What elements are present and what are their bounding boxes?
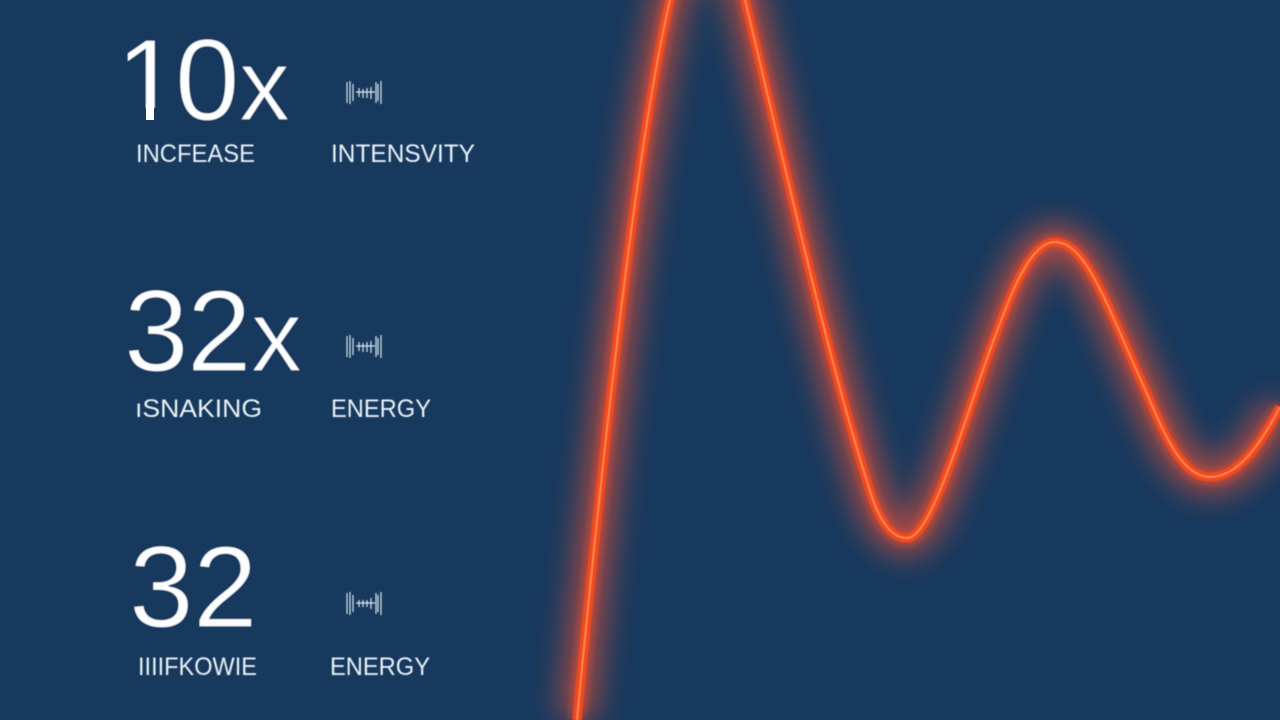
label: garbled word: IIIIFKOWIE <box>138 653 257 681</box>
number: 32x: 3 <box>124 266 189 396</box>
number: 10x: x <box>239 28 290 142</box>
label: INTENSVITY: INTENSVITY <box>331 140 475 168</box>
stat: 32x snaking energy <box>124 266 431 423</box>
stat: 10x increase intensity <box>116 15 475 168</box>
number: 32x: x <box>251 279 302 393</box>
glowing orange wave line <box>577 0 1280 720</box>
number: 10x: 1 <box>116 15 181 145</box>
label: SNAKING: ıSNAKING <box>135 395 262 423</box>
number: 32: 2 <box>193 522 258 652</box>
stat: 32 garbled energy <box>129 522 430 681</box>
label: ENERGY: ENERGY <box>330 653 430 681</box>
label: ENERGY: ENERGY <box>331 395 431 423</box>
icon: waveform 2 <box>347 335 381 358</box>
number: 32x: 2 <box>187 266 252 396</box>
number: 10x: 0 <box>175 15 240 145</box>
icon: waveform 1 <box>347 81 381 104</box>
icon: waveform 3 <box>347 592 381 615</box>
label: INCFEASE: INCFEASE <box>136 140 255 168</box>
number: 32: 3 <box>129 522 194 652</box>
